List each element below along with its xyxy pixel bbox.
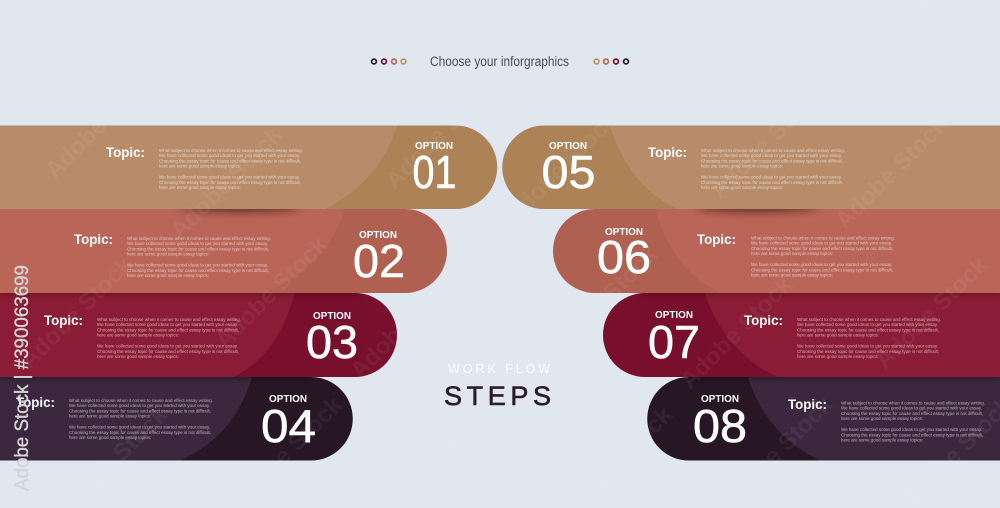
number 06: 06 [597,231,651,283]
topic 02: Topic: [74,232,113,247]
topic 08: Topic: [788,397,827,412]
body text 08: Choosing the essay topic for cause and effect essay type is not difficult, [841,432,983,437]
watermark pattern: Adobe Stock [675,271,798,394]
number 05: 05 [542,146,596,198]
number 07: 07 [648,316,700,368]
body text 05: We have collected some good ideas to get you started with your essay. [701,175,842,180]
body text 04: We have collected some good ideas to get you started with your essay. [69,425,210,430]
number 02: 02 [353,235,405,287]
watermark pattern: Adobe Stock [15,251,138,374]
subheading: WORK FLOW [448,362,550,376]
body text 07: here are some good sample essay topics: [797,333,879,338]
body text 08: here are some good sample essay topics: [841,438,923,442]
body text 03 [97,317,241,359]
body text 04: Choosing the essay topic for cause and effect essay type is not difficult, [69,408,211,413]
number 01: 01 [412,146,456,198]
number 04: 04 [261,400,316,452]
icon: left dots [372,59,406,64]
body text 02: We have collected some good ideas to get you started with your essay. [127,263,268,268]
watermark pattern: Adobe Stock [40,61,163,184]
body text 03: What subject to choose when it comes to cause and effect essay writing. [97,317,241,322]
watermark pattern: Adobe Stock [210,231,333,354]
body text 01 [159,148,303,190]
body text 07: We have collected some good ideas to get you started with your essay. [797,344,938,349]
panel: option 03 [0,287,397,377]
body text 04: What subject to choose when it comes to cause and effect essay writing. [69,398,213,403]
option label 05: OPTION [549,141,587,152]
panel: option 06 [553,202,1000,293]
body text 01: We have collected some good ideas to get you started with your essay. [159,153,300,158]
number 03: 03 [306,316,358,368]
watermark pattern: Adobe Stock [870,251,993,374]
icon: right dots [594,59,628,64]
body text 07: Choosing the essay topic for cause and effect essay type is not difficult, [797,349,939,354]
body text 03: Choosing the essay topic for cause and effect essay type is not difficult, [97,349,239,354]
body text 06: Choosing the essay topic for cause and effect essay type is not difficult, [751,246,893,251]
body text 01: We have collected some good ideas to get you started with your essay. [159,175,300,180]
body text 08 [841,400,985,442]
panel: option 07 [603,287,1000,377]
body text 07 [797,317,941,359]
body text 02: here are some good sample essay topics: [127,252,209,257]
body text 08: We have collected some good ideas to get you started with your essay. [841,406,982,411]
watermark pattern: Adobe Stock [705,81,828,204]
vertical stock id text: Adobe Stock | #390063699 [12,265,33,491]
topic 05: Topic: [648,145,687,160]
watermark pattern: Adobe Stock [165,121,288,244]
topic 03: Topic: [44,313,83,328]
option label 04: OPTION [269,394,307,405]
topic 01: Topic: [106,145,145,160]
option label 02: OPTION [359,230,397,241]
body text 06 [751,236,895,278]
body text 05: here are some good sample essay topics: [701,185,783,190]
body text 03: We have collected some good ideas to get you started with your essay. [97,322,238,327]
body text 02: What subject to choose when it comes to cause and effect essay writing. [127,236,271,241]
header: choose your infographics [372,54,628,69]
option label 03: OPTION [313,311,351,322]
body text 05: Choosing the essay topic for cause and effect essay type is not difficult, [701,180,843,185]
body text 01: Choosing the essay topic for cause and effect essay type is not difficult, [159,158,301,163]
panel: option 08 [647,371,1000,460]
body text 01: Choosing the essay topic for cause and effect essay type is not difficult, [159,180,301,185]
body text 06: Choosing the essay topic for cause and effect essay type is not difficult, [751,267,893,272]
body text 03: We have collected some good ideas to get you started with your essay. [97,344,238,349]
body text 04 [69,398,213,440]
watermark pattern: Adobe Stock [830,111,953,234]
body text 04: We have collected some good ideas to get you started with your essay. [69,403,210,408]
body text 07: Choosing the essay topic for cause and effect essay type is not difficult, [797,327,939,332]
topic 06: Topic: [697,232,736,247]
body text 06: What subject to choose when it comes to cause and effect essay writing. [751,236,895,240]
topic 07: Topic: [744,313,783,328]
panel: option 04 [0,371,353,460]
body text 04: Choosing the essay topic for cause and effect essay type is not difficult, [69,430,211,435]
body text 01: here are some good sample essay topics: [159,164,241,169]
body text 06: We have collected some good ideas to get you started with your essay. [751,241,892,246]
watermark pattern: Adobe Stock [500,106,623,229]
body text 05: Choosing the essay topic for cause and effect essay type is not difficult, [701,158,843,163]
panel: option 01 [0,126,497,209]
body text 08: What subject to choose when it comes to cause and effect essay writing. [841,400,985,406]
body text 02 [127,236,271,278]
watermark pattern: Adobe Stock [345,261,468,384]
body text 08: here are some good sample essay topics: [841,416,923,421]
body text 03: here are some good sample essay topics: [97,354,179,359]
body text 02: Choosing the essay topic for cause and effect essay type is not difficult, [127,268,269,273]
body text 08: Choosing the essay topic for cause and effect essay type is not difficult, [841,411,983,416]
body text 05: What subject to choose when it comes to cause and effect essay writing. [701,148,845,153]
body text 07: What subject to choose when it comes to cause and effect essay writing. [797,317,941,322]
option label 06: OPTION [605,227,643,238]
body text 02: Choosing the essay topic for cause and effect essay type is not difficult, [127,246,269,251]
body text 05: here are some good sample essay topics: [701,164,783,169]
option label 01: OPTION [415,141,453,152]
body text 03: Choosing the essay topic for cause and effect essay type is not difficult, [97,327,239,332]
panel: option 02 [0,202,447,293]
heading: work flow steps [444,362,551,411]
watermark pattern: Adobe Stock [540,241,663,364]
body text 06: here are some good sample essay topics: [751,251,833,256]
body text 06: here are some good sample essay topics: [751,272,833,278]
title: STEPS [444,381,551,411]
number 08: 08 [693,400,747,452]
body text 02: here are some good sample essay topics: [127,273,209,278]
body text 02: We have collected some good ideas to get you started with your essay. [127,241,268,246]
header text: Choose your inforgraphics [430,54,569,69]
body text 04: here are some good sample essay topics: [69,435,151,440]
body text 07: We have collected some good ideas to get you started with your essay. [797,322,938,327]
body text 01: What subject to choose when it comes to cause and effect essay writing. [159,148,303,153]
body text 05: We have collected some good ideas to get you started with your essay. [701,153,842,158]
topic 04: Topic: [16,395,55,410]
option label 08: OPTION [701,394,739,405]
body text 07: here are some good sample essay topics: [797,354,879,359]
panel: option 05 [502,126,1000,209]
body text 05 [701,148,845,190]
option label 07: OPTION [655,310,693,321]
body text 03: here are some good sample essay topics: [97,333,179,338]
body text 08: We have collected some good ideas to get you started with your essay. [841,427,982,432]
body text 04: here are some good sample essay topics: [69,414,151,419]
body text 01: here are some good sample essay topics: [159,185,241,190]
body text 06: We have collected some good ideas to get you started with your essay. [751,262,892,267]
watermark pattern: Adobe Stock [380,71,503,194]
